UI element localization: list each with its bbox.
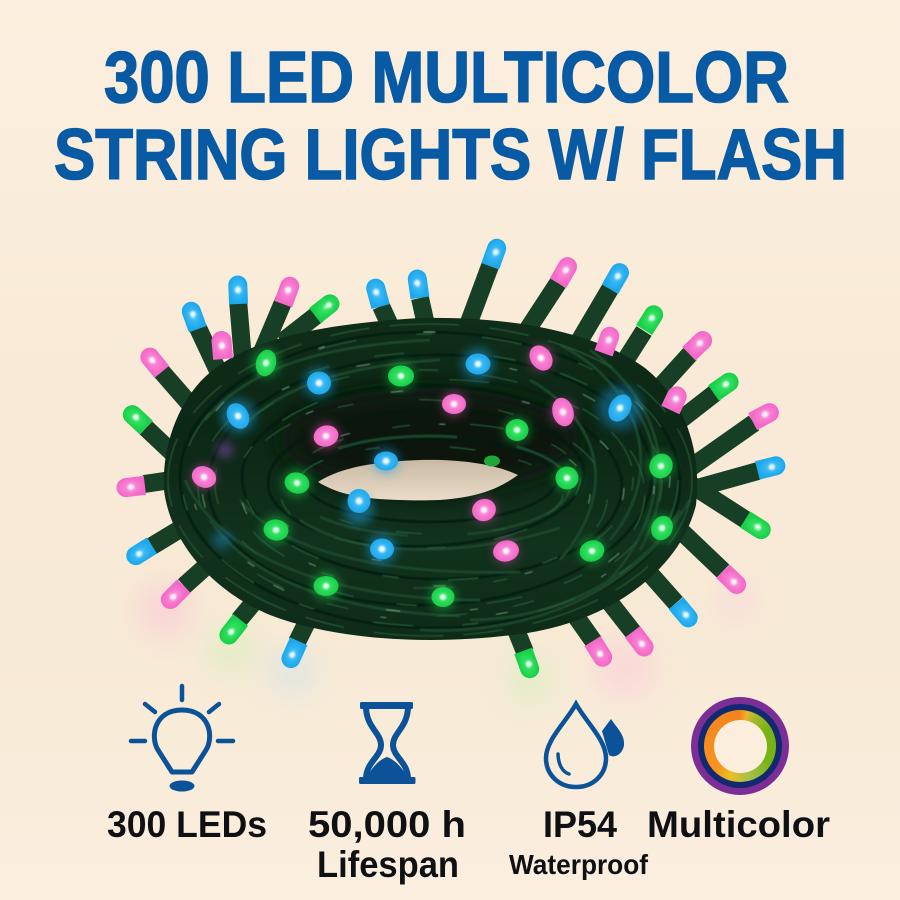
label: 50,000 h Lifespan bbox=[308, 804, 466, 885]
label: IP54 Waterproof: Waterproof bbox=[509, 849, 649, 880]
light stems bbox=[144, 266, 758, 652]
icon: water drops bbox=[546, 704, 624, 787]
icon: hourglass bbox=[359, 702, 416, 784]
label: IP54 Waterproof bbox=[509, 804, 649, 880]
LED hot spots bbox=[128, 249, 775, 667]
title: 300 LED MULTICOLOR bbox=[104, 38, 789, 118]
wire coil wreath bbox=[164, 318, 697, 640]
icon: light bulb bbox=[131, 686, 233, 792]
coloured reflections on the wire bbox=[192, 346, 675, 610]
label: 300 LEDs: 300 LEDs bbox=[107, 804, 267, 845]
label: IP54 Waterproof: IP54 bbox=[543, 804, 617, 845]
wreath centre hole bbox=[318, 460, 518, 500]
title bbox=[54, 38, 847, 195]
wire strands bbox=[168, 324, 692, 636]
floor glow under the lights bbox=[139, 578, 757, 704]
icon: multicolor ring bbox=[691, 697, 789, 795]
LED bulbs on the coil surface bbox=[188, 341, 677, 607]
label: 50,000 h Lifespan: 50,000 h bbox=[308, 804, 466, 845]
label: Multicolor: Multicolor bbox=[647, 804, 830, 845]
outer LED bulbs bbox=[115, 236, 787, 681]
label: 50,000 h Lifespan: Lifespan bbox=[317, 844, 459, 885]
inner shade bbox=[280, 388, 580, 492]
